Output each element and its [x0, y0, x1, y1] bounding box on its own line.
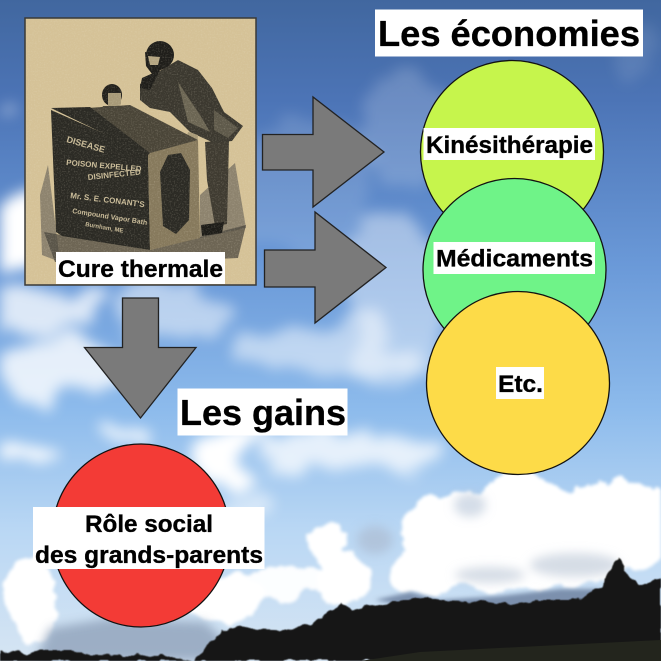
- text: cabinet lettering: POISON EXPELLED: [66, 158, 142, 174]
- icon: distant mountains: [35, 589, 610, 661]
- arrow: to Médicaments: [264, 212, 386, 323]
- circle: Kinésithérapie: Kinésithérapie: [426, 132, 593, 159]
- icon: treeline: [0, 557, 661, 661]
- icon: standing man: [140, 41, 243, 236]
- icon: hatched shadows behind the cabinet: [40, 163, 246, 262]
- circle: Rôle social des grands-parents: [33, 444, 264, 627]
- picture: Cure thermale engraving: [25, 18, 256, 285]
- arrow: to Kinésithérapie: [262, 97, 384, 207]
- text: cabinet lettering: DISINFECTED: [87, 167, 141, 182]
- heading: Les gains: Les gains: [180, 392, 346, 433]
- heading: Les économies: Les économies: [378, 13, 640, 54]
- circle: Kinésithérapie: [420, 60, 604, 244]
- label: Cure thermale: Cure thermale: [58, 256, 223, 283]
- text: cabinet lettering: Burnham, ME: [85, 222, 124, 235]
- icon: man's head in the cabinet: [100, 84, 128, 112]
- circle: Médicaments: Médicaments: [436, 246, 593, 272]
- text: cabinet lettering: [65, 134, 148, 235]
- text: cabinet lettering: Mr. S. E. CONANT'S: [70, 191, 146, 209]
- circle: Rôle social des grands-parents: des grands-parents: [35, 542, 263, 569]
- circle: Etc.: Etc.: [498, 371, 543, 398]
- circle: Etc.: [426, 292, 610, 474]
- arrow: down to Les gains: [84, 298, 196, 418]
- text: cabinet lettering: DISEASE: [65, 134, 106, 155]
- text: cabinet lettering: Compound Vapor Bath: [72, 208, 148, 227]
- icon: steam cabinet: [51, 105, 200, 250]
- circle: Rôle social des grands-parents: Rôle social: [85, 511, 213, 538]
- circle: Médicaments: [423, 178, 606, 362]
